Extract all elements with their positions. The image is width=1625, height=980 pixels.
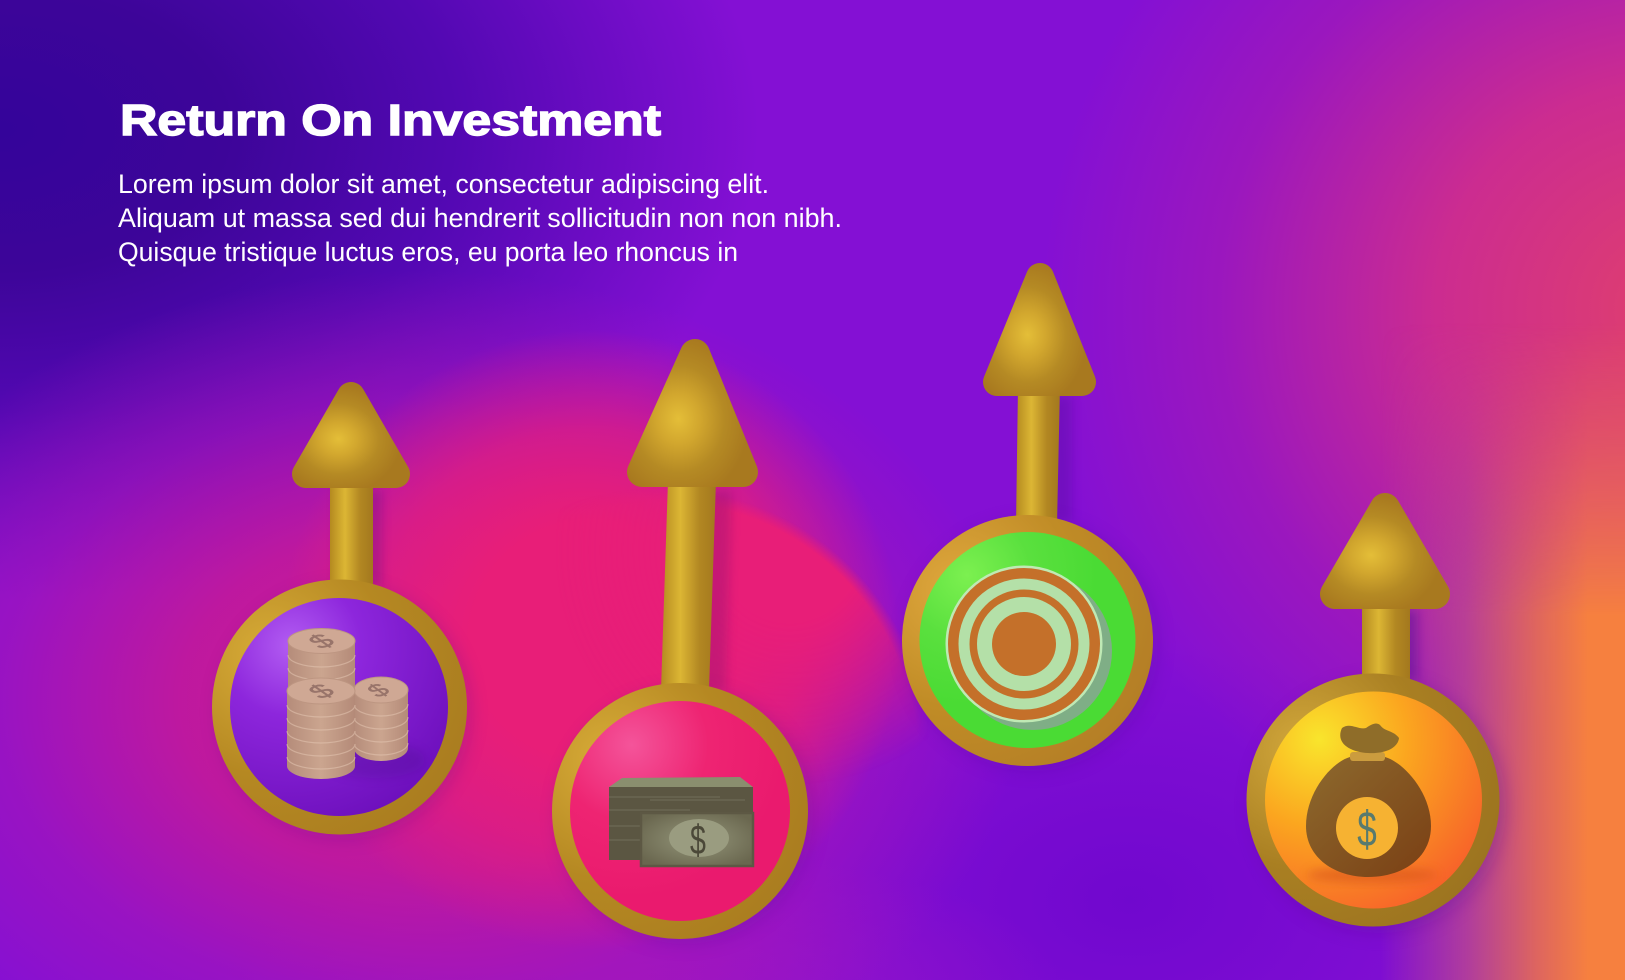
purple disc xyxy=(230,598,448,816)
item 1: coins arrow xyxy=(212,396,471,839)
arrow head xyxy=(997,277,1082,382)
arrow shaft xyxy=(330,480,373,585)
icon: cash stack: $ xyxy=(690,815,706,863)
gold ring xyxy=(212,580,467,834)
description text xyxy=(118,169,842,267)
description text: Lorem ipsum dolor sit amet, consectetur adipiscing elit. xyxy=(118,169,769,199)
item 3: target arrow xyxy=(902,277,1158,771)
icon: cash stack xyxy=(609,777,753,866)
icon: coin stacks xyxy=(287,628,425,779)
orange disc xyxy=(1265,692,1482,908)
description text: Aliquam ut massa sed dui hendrerit sollicitudin non non nibh. xyxy=(118,203,842,233)
icon: money bag: $ xyxy=(1357,802,1377,858)
arrow head xyxy=(306,396,396,474)
description text: Quisque tristique luctus eros, eu porta leo rhoncus in xyxy=(118,237,738,267)
gold ring xyxy=(1246,674,1500,926)
icon: coin stacks: $ xyxy=(302,630,342,653)
arrow shaft xyxy=(1016,385,1060,525)
arrow shaft xyxy=(661,480,716,690)
gold ring xyxy=(552,683,808,939)
arrow shaft xyxy=(1362,600,1410,680)
item 2: cash arrow xyxy=(552,354,813,944)
arrow head xyxy=(642,354,743,472)
arrow head xyxy=(1335,508,1435,594)
item 4: money bag arrow xyxy=(1246,508,1506,933)
pink disc xyxy=(570,701,790,921)
icon: target xyxy=(946,566,1112,730)
title: Return On Investment xyxy=(120,96,661,145)
icon: money bag xyxy=(1306,724,1437,883)
gold ring xyxy=(902,515,1153,766)
icon: coin stacks: $ xyxy=(302,680,342,703)
icon: coin stacks: $ xyxy=(361,680,396,701)
green disc xyxy=(920,532,1136,748)
